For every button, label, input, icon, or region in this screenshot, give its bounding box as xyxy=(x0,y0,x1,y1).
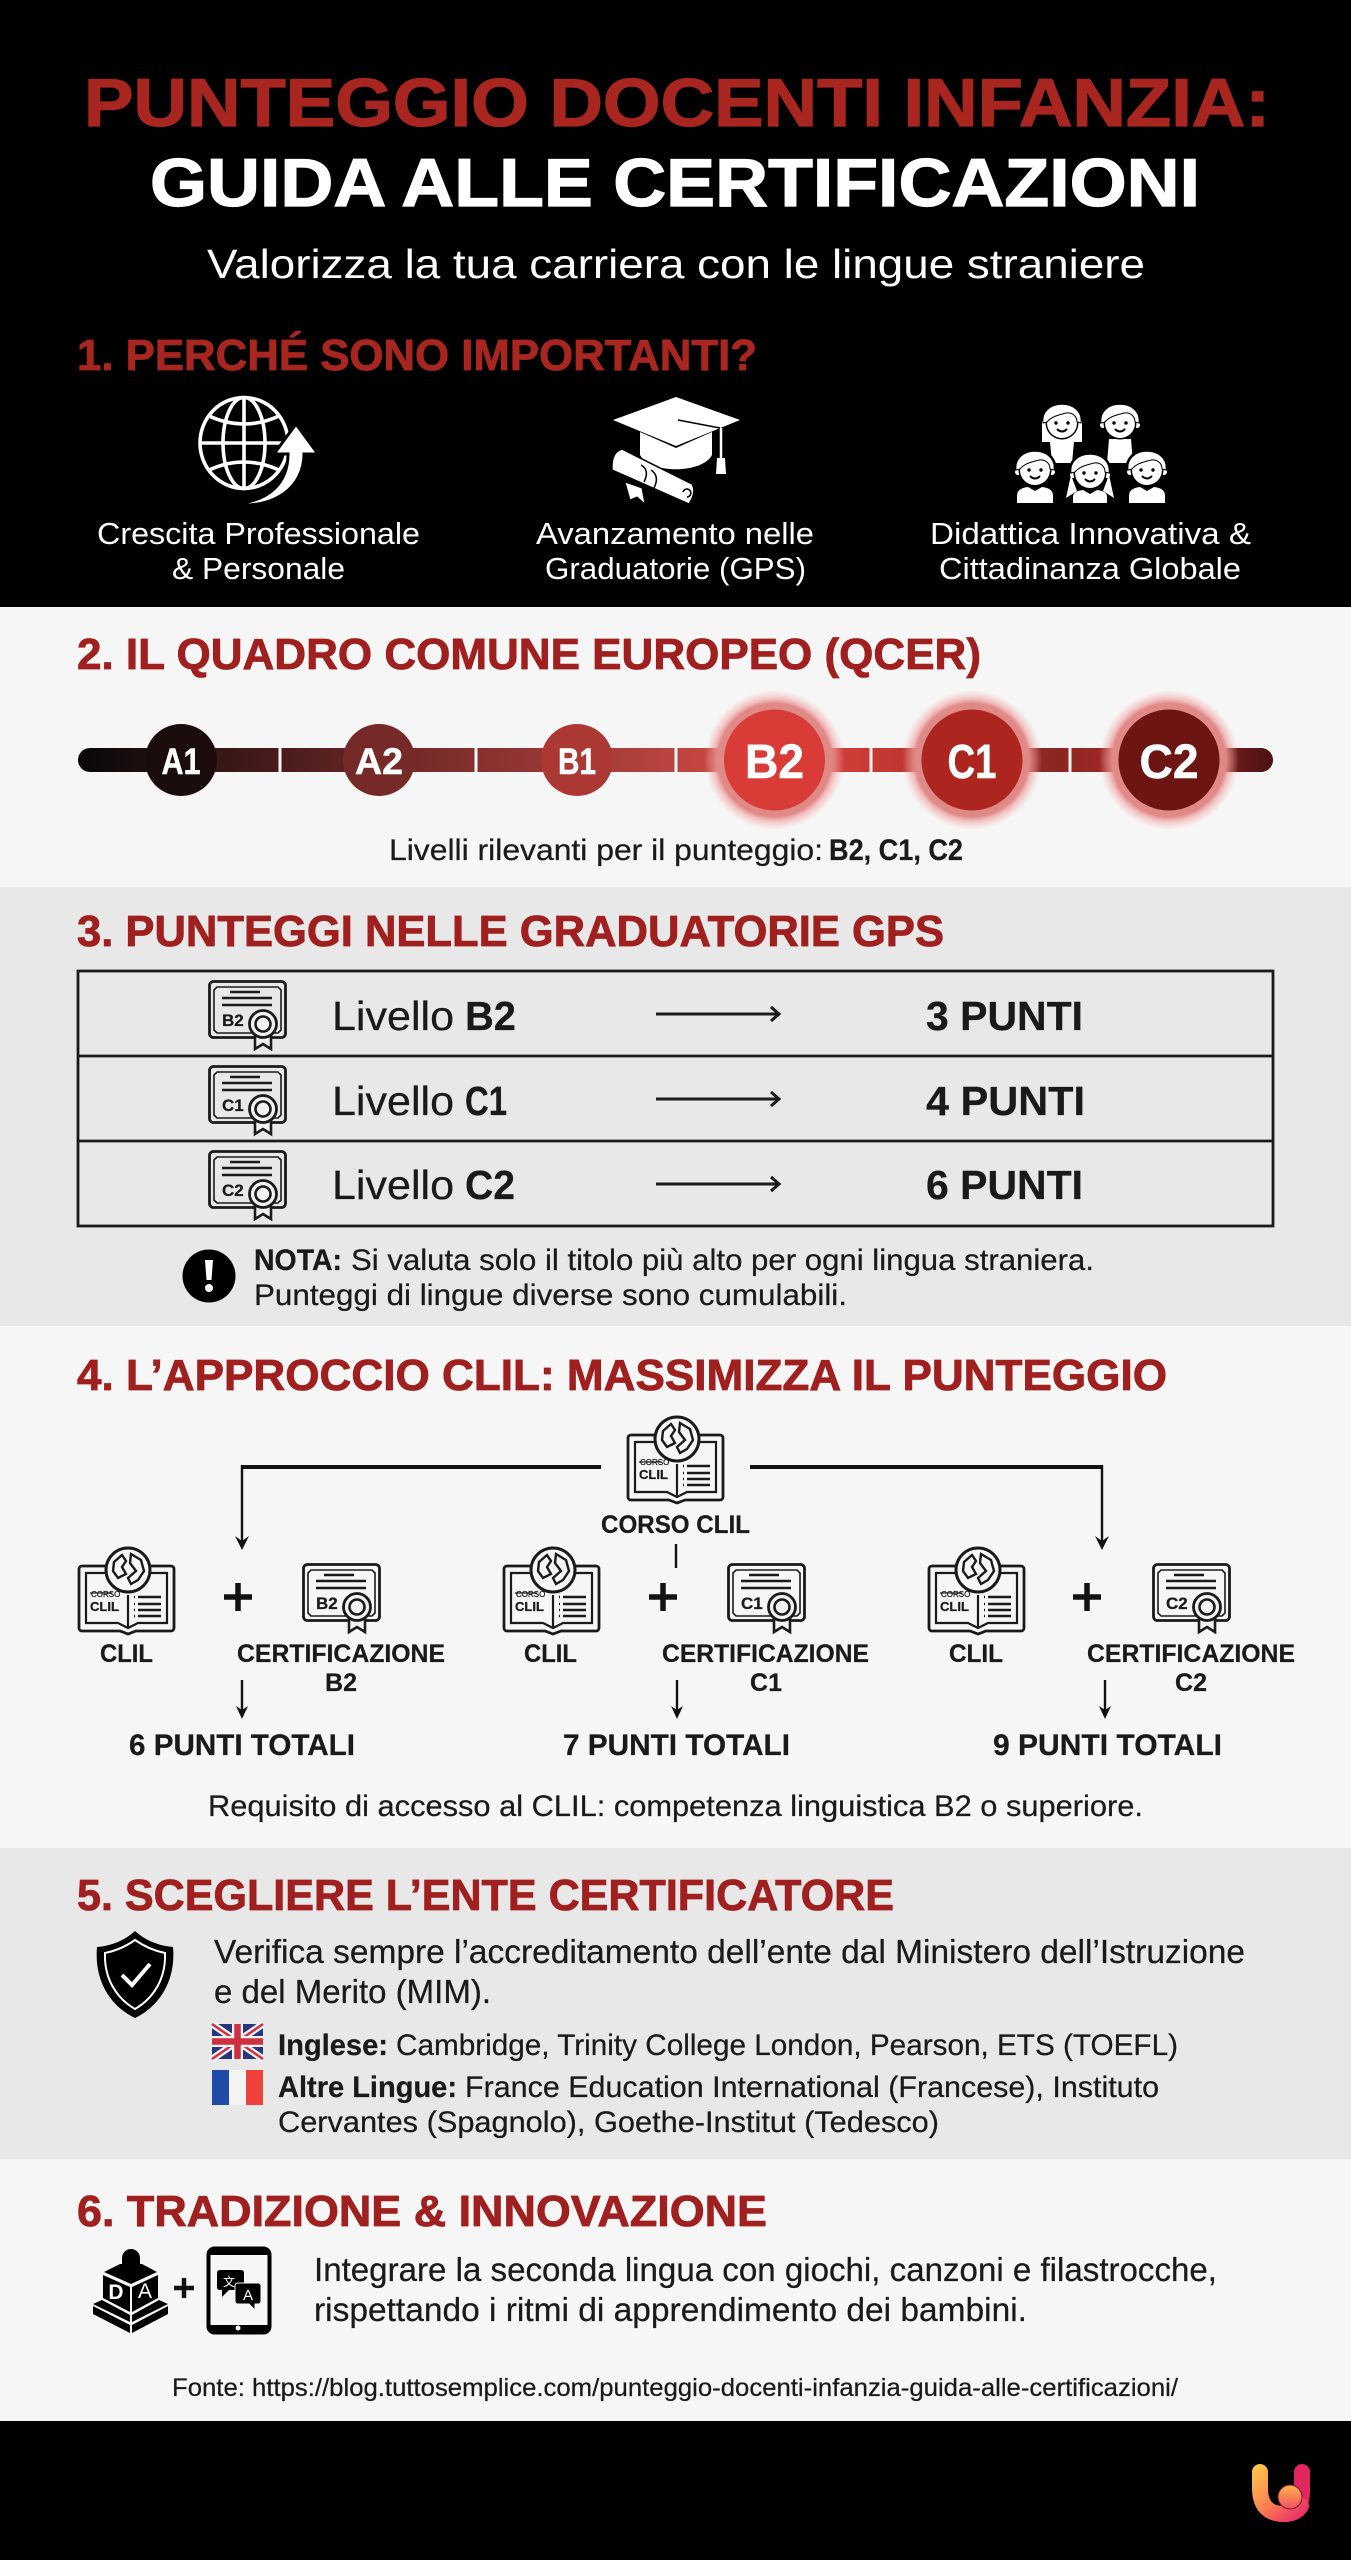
combo: CLIL + C2: 9 PUNTI TOTALI xyxy=(993,1729,1222,1762)
combo: CLIL + B2: 6 PUNTI TOTALI xyxy=(129,1729,355,1762)
level B1: B1 xyxy=(558,741,596,782)
level C2 xyxy=(1099,690,1239,830)
label: growth: & Personale xyxy=(172,551,345,586)
label: teaching xyxy=(930,516,1251,586)
child front right xyxy=(1125,448,1169,503)
combo: CLIL + B2: B2 xyxy=(316,1594,338,1613)
label: ranking: Graduatorie (GPS) xyxy=(545,551,806,586)
English bodies: Cambridge, Trinity College London, Pearson, ETS (TOEFL) xyxy=(396,2029,1178,2062)
combo: CLIL + C1: CLIL xyxy=(515,1599,544,1614)
note text: Punteggi di lingue diverse sono cumulabili. xyxy=(254,1279,847,1312)
combo: CLIL + C2: CLIL xyxy=(949,1640,1003,1668)
icon: translation tablet xyxy=(208,2248,270,2333)
note text xyxy=(254,1244,1094,1312)
level A2 xyxy=(343,724,415,796)
combo: CLIL + C2: CORSO xyxy=(941,1590,970,1599)
row B2 xyxy=(210,982,1083,1049)
tradition text: rispettando i ritmi di apprendimento dei bambini. xyxy=(314,2291,1027,2328)
row C1: C1 xyxy=(465,1078,507,1124)
label: CLIL course: CORSO CLIL xyxy=(601,1511,750,1539)
level A1 xyxy=(145,724,217,796)
combo: CLIL + B2: B2 xyxy=(325,1669,357,1697)
panel: GPS scores xyxy=(0,887,1351,1326)
title line 2: GUIDA ALLE CERTIFICAZIONI xyxy=(150,145,1200,221)
other language bodies: Cervantes (Spagnolo), Goethe-Institut (Tedesco) xyxy=(278,2106,939,2139)
row C2: 6 PUNTI xyxy=(926,1162,1083,1208)
icon: CLIL course xyxy=(628,1417,723,1503)
combo: CLIL + C2: CERTIFICAZIONE xyxy=(1087,1640,1295,1668)
icon: toy blocks: D xyxy=(108,2281,124,2304)
combo: CLIL + C2: C2 xyxy=(1175,1669,1207,1697)
combo: CLIL + B2 xyxy=(79,1548,445,1762)
combo: CLIL + C1: CERTIFICAZIONE xyxy=(662,1640,869,1668)
other language bodies: Altre Lingue: xyxy=(278,2071,457,2104)
heading 4: 4. L’APPROCCIO CLIL: MASSIMIZZA IL PUNTEGGIO xyxy=(77,1351,1167,1400)
label: ranking xyxy=(536,516,814,586)
level B2 xyxy=(704,690,844,830)
connector: left arrow xyxy=(235,1465,601,1550)
combo: CLIL + C1: CLIL xyxy=(524,1640,577,1668)
level C1: C1 xyxy=(948,736,996,789)
heading 3: 3. PUNTEGGI NELLE GRADUATORIE GPS xyxy=(77,907,944,956)
combo: CLIL + C1: CORSO xyxy=(516,1590,545,1599)
combo: CLIL + C1: C1 xyxy=(741,1594,763,1613)
verify text: e del Merito (MIM). xyxy=(214,1973,491,2010)
icon: exclamation xyxy=(182,1250,236,1302)
caption: relevant levels: B2, C1, C2 xyxy=(829,834,963,867)
verify text xyxy=(214,1933,1245,2010)
icon: UK flag xyxy=(212,2024,263,2059)
icon: graduation cap and diploma xyxy=(612,397,740,504)
level C2: C2 xyxy=(1140,736,1198,789)
row B2: B2 xyxy=(465,993,516,1039)
plus xyxy=(174,2278,194,2298)
row C1 xyxy=(210,1066,1085,1134)
verify text: Verifica sempre l’accreditamento dell’ente dal Ministero dell’Istruzione xyxy=(214,1933,1245,1970)
icon: translation tablet: 文 xyxy=(223,2274,235,2289)
label: ranking: Avanzamento nelle xyxy=(536,516,814,551)
label: teaching: Didattica Innovativa & xyxy=(930,516,1251,551)
label: growth xyxy=(97,516,420,586)
icon: CLIL course: CLIL xyxy=(639,1467,668,1482)
label: teaching: Cittadinanza Globale xyxy=(939,551,1241,586)
row B2: Livello xyxy=(332,993,454,1039)
icon: group of children xyxy=(1013,404,1169,503)
score table xyxy=(78,971,1273,1226)
panel: footer xyxy=(0,2421,1351,2560)
child top left xyxy=(1042,404,1082,463)
child front left xyxy=(1013,448,1057,503)
panel: tradition and innovation xyxy=(0,2159,1351,2421)
row C2: C2 xyxy=(222,1181,244,1200)
level C1 xyxy=(902,690,1042,830)
combo: CLIL + C1: 7 PUNTI TOTALI xyxy=(563,1729,790,1762)
combo: CLIL + C2 xyxy=(929,1548,1295,1762)
tradition text xyxy=(314,2251,1217,2328)
level B2: B2 xyxy=(745,736,804,789)
combo: CLIL + C2: C2 xyxy=(1166,1594,1188,1613)
combo: CLIL + B2: CORSO xyxy=(91,1590,120,1599)
row B2: 3 PUNTI xyxy=(926,993,1083,1039)
level A1: A1 xyxy=(162,741,200,782)
row C1: Livello xyxy=(332,1078,454,1124)
combo: CLIL + C1 xyxy=(504,1548,869,1762)
combo: CLIL + C1: C1 xyxy=(750,1669,782,1697)
note text: Si valuta solo il titolo più alto per ogni lingua straniera. xyxy=(351,1244,1094,1277)
panel: certifying body xyxy=(0,1848,1351,2159)
level track xyxy=(78,746,1273,774)
icon: French flag xyxy=(212,2070,263,2105)
icon: shield xyxy=(97,1931,173,2018)
child front middle xyxy=(1066,451,1114,503)
caption: relevant levels: Livelli rilevanti per il punteggio: xyxy=(389,834,823,867)
combo: CLIL + B2: CLIL xyxy=(90,1599,119,1614)
row C2 xyxy=(210,1152,1083,1219)
icon: CLIL course: CORSO xyxy=(640,1458,669,1467)
panel: QCER levels xyxy=(0,607,1351,887)
icon: toy blocks xyxy=(93,2249,168,2333)
child top right xyxy=(1100,404,1140,463)
subtitle: Valorizza la tua carriera con le lingue straniere xyxy=(207,241,1145,287)
heading 5: 5. SCEGLIERE L’ENTE CERTIFICATORE xyxy=(77,1871,894,1920)
CLIL requirement: Requisito di accesso al CLIL: competenza linguistica B2 o superiore. xyxy=(208,1790,1143,1823)
row C2: Livello xyxy=(332,1162,454,1208)
other language bodies: France Education International (Francese), Instituto xyxy=(465,2071,1159,2104)
level A2: A2 xyxy=(355,741,403,782)
heading 1: 1. PERCHÉ SONO IMPORTANTI? xyxy=(77,330,757,380)
logo xyxy=(1260,2472,1302,2514)
combo: CLIL + B2: CERTIFICAZIONE xyxy=(237,1640,445,1668)
icon: toy blocks: A xyxy=(138,2280,152,2303)
row C1: 4 PUNTI xyxy=(926,1078,1085,1124)
connector: right arrow xyxy=(750,1465,1109,1550)
connector: center xyxy=(675,1544,677,1568)
English bodies: Inglese: xyxy=(278,2029,388,2062)
row C1: C1 xyxy=(222,1096,244,1115)
combo: CLIL + C2: CLIL xyxy=(940,1599,969,1614)
note text: NOTA: xyxy=(254,1244,342,1277)
panel: CLIL approach xyxy=(0,1326,1351,1848)
other language bodies xyxy=(278,2071,1159,2139)
row C2: C2 xyxy=(465,1162,515,1208)
icon: translation tablet: A xyxy=(243,2287,253,2304)
row B2: B2 xyxy=(222,1011,244,1030)
label: growth: Crescita Professionale xyxy=(97,516,420,551)
heading 6: 6. TRADIZIONE & INNOVAZIONE xyxy=(77,2187,767,2236)
source: Fonte: https://blog.tuttosemplice.com/punteggio-docenti-infanzia-guida-alle-certificazioni/ xyxy=(172,2374,1178,2402)
heading 2: 2. IL QUADRO COMUNE EUROPEO (QCER) xyxy=(77,630,981,679)
title line 1: PUNTEGGIO DOCENTI INFANZIA: xyxy=(84,65,1270,141)
combo: CLIL + B2: CLIL xyxy=(100,1640,153,1668)
tradition text: Integrare la seconda lingua con giochi, canzoni e filastrocche, xyxy=(314,2251,1217,2288)
panel: header xyxy=(0,0,1351,607)
icon: globe with arrow xyxy=(200,397,318,505)
level B1 xyxy=(541,724,613,796)
